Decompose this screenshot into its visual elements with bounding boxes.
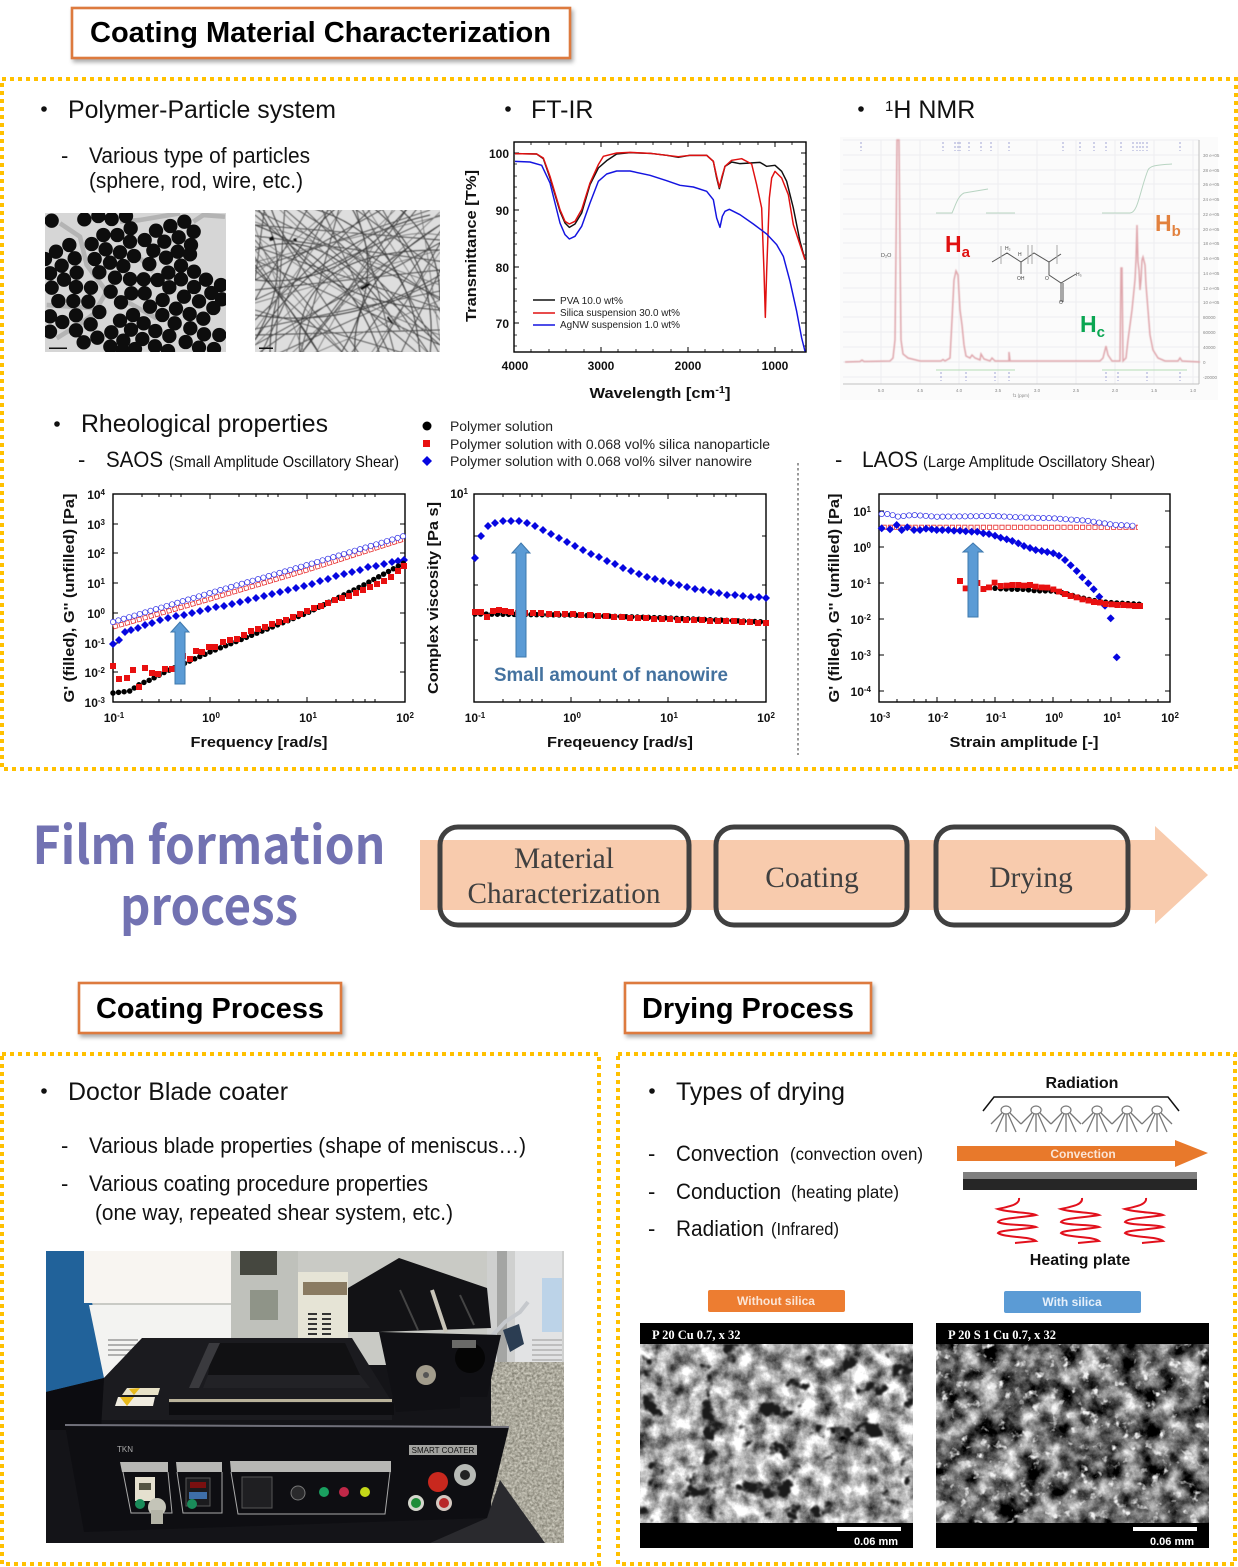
chart: 1H NMR spectrum: O	[1059, 300, 1063, 306]
chart: 1H NMR spectrum: 40000	[1203, 345, 1216, 350]
chart: 1H NMR spectrum: H₃	[1076, 272, 1082, 278]
chart: complex viscosity: Freqeuency [rad/s]	[547, 734, 693, 751]
text block: doctor blade coater: Various coating procedure properties	[89, 1171, 428, 1196]
heading: drying process: Drying Process	[642, 993, 854, 1025]
chart: LAOS strain sweep: 10	[853, 541, 867, 555]
chart: 1H NMR spectrum: 80000	[1203, 315, 1216, 320]
label: without silica	[708, 1290, 845, 1312]
chart: LAOS strain sweep: 0	[1058, 711, 1063, 720]
chart: 1H NMR spectrum: a	[962, 244, 971, 261]
panel: coating process	[2, 1054, 599, 1564]
chart: LAOS strain sweep: 10	[1103, 711, 1116, 725]
axis labels: -2	[98, 666, 106, 675]
chart: complex viscosity: 10	[757, 711, 770, 725]
chart: LAOS strain sweep: -3	[883, 711, 891, 720]
micrograph: with silica: P 20 S 1 Cu 0.7, x 32	[948, 1328, 1056, 1342]
chart: 1H NMR spectrum: 30 e+05	[1203, 153, 1220, 158]
tick labels: 1.5	[1151, 388, 1158, 393]
tick labels: 3.0	[1034, 388, 1041, 393]
chart: LAOS strain sweep: G' (filled), G'' (unfilled) [Pa]	[826, 494, 843, 702]
chart: FT-IR spectra: 80	[496, 261, 509, 275]
tick labels: 4.5	[917, 388, 924, 393]
step: material characterization: Characterization	[468, 878, 661, 910]
chart: LAOS strain sweep: 10	[928, 711, 941, 725]
text block: rheological properties: Rheological properties	[81, 410, 328, 438]
heading: 1H NMR: H NMR	[893, 96, 975, 124]
chart: SAOS storage and loss modulus	[61, 488, 414, 751]
chart: 1H NMR spectrum: 20 e+05	[1203, 227, 1220, 232]
chart: LAOS strain sweep: -2	[864, 613, 872, 622]
chart: LAOS strain sweep: -1	[999, 711, 1007, 720]
axis labels: 10	[202, 711, 215, 725]
text block: polymer-particle system	[41, 96, 336, 193]
text block: LAOS	[835, 447, 1155, 472]
title: film formation process	[32, 804, 386, 940]
chart: LAOS strain sweep: 10	[986, 711, 999, 725]
axis labels: -3	[98, 696, 106, 705]
tick labels: 5.0	[878, 388, 885, 393]
legend: polymer solutions: Polymer solution with 0.068 vol% silver nanowire	[450, 453, 752, 469]
micrograph: without silica	[640, 1323, 913, 1548]
micrograph: without silica: P 20 Cu 0.7, x 32	[652, 1328, 741, 1342]
panel: drying process	[618, 1054, 1235, 1564]
heading: coating process: Coating Process	[96, 993, 324, 1025]
label: with silica: With silica	[1042, 1295, 1102, 1309]
chart: LAOS strain sweep: 2	[1174, 711, 1179, 720]
chart: 1H NMR spectrum: H	[1155, 210, 1172, 236]
heading: Coating Material Characterization	[72, 8, 570, 58]
text block: types of drying: (heating plate)	[791, 1182, 899, 1202]
chart: FT-IR spectra: 70	[496, 317, 509, 331]
image: nanowire micrograph	[255, 210, 440, 352]
heading: Coating Material Characterization: Coating Material Characterization	[90, 17, 551, 49]
chart: 1H NMR spectrum: 0	[1203, 360, 1206, 365]
chart: LAOS strain sweep: 10	[1161, 711, 1174, 725]
machine control panel	[117, 1445, 477, 1524]
chart: LAOS strain sweep: 10	[1045, 711, 1058, 725]
heading: FT-IR: FT-IR	[531, 96, 594, 124]
chart: 1H NMR spectrum: c	[1097, 324, 1105, 341]
axis labels: -1	[98, 637, 106, 646]
axis labels: -1	[117, 711, 125, 720]
chart: 1H NMR spectrum: 28 e+05	[1203, 168, 1220, 173]
text block: doctor blade coater: (one way, repeated shear system, etc.)	[95, 1200, 453, 1225]
annotation: small amount of nanowire: Small amount of nanowire	[494, 665, 728, 686]
text block: types of drying: -	[648, 1179, 655, 1204]
tick labels: 2.0	[1112, 388, 1119, 393]
chart: FT-IR spectra: 2000	[675, 359, 702, 373]
text block: rheological properties	[54, 410, 399, 472]
text block: types of drying: Conduction	[676, 1179, 781, 1204]
chart: LAOS strain sweep: -1	[864, 577, 872, 586]
machine control panel: SMART COATER	[412, 1446, 475, 1455]
tick labels: 4.0	[956, 388, 963, 393]
chart: complex viscosity	[425, 487, 775, 751]
chart: 1H NMR spectrum: OH	[1017, 276, 1025, 282]
chart: SAOS storage and loss modulus: G' (filled), G'' (unfilled) [Pa]	[61, 494, 78, 702]
chart: 1H NMR spectrum: 60000	[1203, 330, 1216, 335]
tick labels: 1.0	[1190, 388, 1197, 393]
step: coating: Coating	[765, 862, 859, 894]
chart: complex viscosity: 2	[770, 711, 775, 720]
micrograph: with silica: 0.06 mm	[1150, 1536, 1194, 1548]
tick labels: f1 (ppm)	[1013, 393, 1030, 398]
text block: polymer-particle system: Polymer-Particle system	[68, 96, 336, 124]
text block: types of drying: Convection	[676, 1141, 779, 1166]
chart: complex viscosity: 10	[660, 711, 673, 725]
axis labels: 10	[87, 547, 101, 561]
text block: types of drying: (Infrared)	[771, 1219, 839, 1239]
heading: 1H NMR: 1	[885, 98, 893, 115]
chart: 1H NMR spectrum: H₂	[1005, 246, 1011, 252]
chart: 1H NMR spectrum: O	[1045, 276, 1049, 282]
axis labels: 10	[299, 711, 312, 725]
text block: types of drying: Radiation	[676, 1216, 764, 1241]
axis labels: 10	[85, 696, 98, 710]
axis labels: 2	[409, 711, 414, 720]
arrow: LAOS increase	[963, 543, 983, 617]
chart: 1H NMR spectrum: H	[945, 231, 962, 257]
chart: 1H NMR spectrum: 12 e+05	[1203, 286, 1220, 291]
text block: types of drying: -	[648, 1141, 655, 1166]
heading: drying process	[625, 983, 871, 1033]
axis labels: 10	[85, 666, 98, 680]
integrals	[936, 164, 1172, 213]
diagram: drying mechanisms: Heating plate	[1030, 1252, 1130, 1269]
micrograph: without silica: 0.06 mm	[854, 1536, 898, 1548]
tick labels	[878, 388, 1197, 398]
chart: 1H NMR spectrum: 24 e+05	[1203, 197, 1220, 202]
chart: complex viscosity: 10	[450, 487, 464, 501]
photo: doctor blade coater machine	[46, 1251, 564, 1543]
chart: SAOS storage and loss modulus: Frequency [rad/s]	[190, 734, 328, 751]
text block: types of drying: Types of drying	[676, 1078, 845, 1106]
chart: LAOS strain sweep: Strain amplitude [-]	[950, 734, 1099, 751]
legend: FT-IR	[533, 296, 680, 331]
chart: LAOS strain sweep: 10	[851, 685, 864, 699]
icon: radiation lamps	[991, 1106, 1172, 1132]
tick labels: 2.5	[1073, 388, 1080, 393]
tick labels: 3.5	[995, 388, 1002, 393]
chart: complex viscosity: -1	[478, 711, 486, 720]
chart: 1H NMR spectrum: H	[1080, 311, 1097, 337]
chart: complex viscosity: 0	[576, 711, 581, 720]
chart: LAOS strain sweep: -3	[864, 649, 872, 658]
text block: LAOS: -	[835, 447, 842, 472]
axis labels: 10	[87, 607, 101, 621]
chart: complex viscosity: 10	[465, 711, 478, 725]
chart: LAOS strain sweep: 1	[1116, 711, 1121, 720]
axis labels: 0	[215, 711, 220, 720]
chart: 1H NMR spectrum	[840, 137, 1220, 400]
curve: blue AgNW suspension	[515, 161, 805, 351]
label: without silica: Without silica	[737, 1294, 815, 1308]
legend: FT-IR: PVA 10.0 wt%	[560, 296, 623, 307]
text block: doctor blade coater: Various blade properties (shape of meniscus…)	[89, 1133, 526, 1158]
chart: LAOS strain sweep: -4	[864, 685, 872, 694]
label: with silica	[1004, 1291, 1141, 1313]
chart: FT-IR spectra: -1	[715, 385, 725, 396]
chart: LAOS strain sweep: 1	[867, 505, 872, 514]
text block: doctor blade coater: -	[61, 1171, 68, 1196]
legend: FT-IR: AgNW suspension 1.0 wt%	[560, 320, 680, 331]
chart: FT-IR spectra: 4000	[502, 359, 529, 373]
axis labels: 10	[104, 711, 117, 725]
arrow: convection	[957, 1140, 1208, 1167]
legend: FT-IR: Silica suspension 30.0 wt%	[560, 308, 680, 319]
chart: 1H NMR spectrum: 16 e+05	[1203, 256, 1220, 261]
text block: doctor blade coater: -	[61, 1133, 68, 1158]
chart: FT-IR spectra	[463, 142, 806, 402]
heading: coating process	[79, 983, 341, 1033]
icon: heat waves	[998, 1198, 1163, 1243]
diagram: drying mechanisms: Radiation	[1046, 1075, 1118, 1092]
axis labels: 10	[87, 518, 101, 532]
chart: complex viscosity: 1	[673, 711, 678, 720]
chart: LAOS strain sweep: 10	[851, 577, 864, 591]
step: drying: Drying	[989, 862, 1073, 894]
micrograph: with silica	[936, 1323, 1209, 1548]
axis labels: 1	[312, 711, 317, 720]
chart: FT-IR spectra: 90	[496, 204, 509, 218]
curve: red silica suspension	[515, 152, 805, 317]
text block: polymer-particle system: (sphere, rod, wire, etc.)	[89, 168, 303, 193]
text block: LAOS: (Large Amplitude Oscillatory Shear)	[923, 454, 1155, 471]
text block: rheological properties: (Small Amplitude Oscillatory Shear)	[169, 454, 399, 471]
step: coating	[716, 827, 907, 925]
axis labels: 3	[101, 518, 106, 527]
legend: polymer solutions	[422, 418, 770, 469]
chart: 1H NMR spectrum: 14 e+05	[1203, 271, 1220, 276]
chart: LAOS strain sweep: 0	[867, 541, 872, 550]
chart: 1H NMR spectrum: 26 e+05	[1203, 182, 1220, 187]
axis labels: 10	[87, 577, 101, 591]
axis labels: 0	[101, 607, 106, 616]
arrow: viscosity increase	[512, 543, 530, 657]
axis labels: 1	[101, 577, 106, 586]
chart: 1H NMR spectrum: H	[1018, 252, 1022, 258]
chart: 1H NMR spectrum: -20000	[1203, 375, 1218, 380]
axis labels	[85, 488, 414, 725]
text block: types of drying	[648, 1078, 923, 1241]
chart: 1H NMR spectrum: b	[1172, 223, 1181, 240]
text block: types of drying: -	[648, 1216, 655, 1241]
axis labels: 4	[101, 488, 106, 497]
chart: LAOS strain sweep: 10	[853, 505, 867, 519]
chart: 1H NMR spectrum: 10 e+05	[1203, 300, 1220, 305]
legend: polymer solutions: Polymer solution with 0.068 vol% silica nanoparticle	[450, 436, 770, 452]
step: material characterization	[440, 827, 689, 925]
chart: FT-IR spectra: 1000	[762, 359, 789, 373]
axis labels: 10	[85, 637, 98, 651]
text block: polymer-particle system: -	[61, 143, 68, 168]
chart: 1H NMR spectrum: 18 e+05	[1203, 241, 1220, 246]
step: drying	[936, 827, 1128, 925]
chart: LAOS strain sweep: 10	[870, 711, 883, 725]
step: material characterization: Material	[514, 843, 614, 875]
diagram: drying mechanisms	[957, 1075, 1208, 1269]
series: hollow red and blue	[113, 536, 404, 627]
chart: 1H NMR spectrum: 22 e+05	[1203, 212, 1220, 217]
text block: doctor blade coater	[41, 1078, 526, 1225]
axis labels: 2	[101, 547, 106, 556]
chart: FT-IR spectra: 100	[489, 147, 509, 161]
chart: complex viscosity: 10	[563, 711, 576, 725]
chart: FT-IR spectra: Wavelength [cm	[590, 385, 704, 402]
text block: doctor blade coater: Doctor Blade coater	[68, 1078, 288, 1106]
chart: LAOS strain sweep: -2	[941, 711, 949, 720]
text block: types of drying: (convection oven)	[790, 1144, 923, 1164]
arrow: convection: Convection	[1050, 1147, 1116, 1161]
chart: LAOS strain sweep: 10	[851, 649, 864, 663]
text block: rheological properties: -	[78, 447, 85, 472]
text block: LAOS: LAOS	[862, 447, 918, 472]
molecule	[992, 245, 1076, 302]
heading: 1H NMR	[858, 96, 975, 124]
title: film formation process: Film formation	[32, 804, 386, 879]
chart: complex viscosity: Complex viscosity [Pa s]	[425, 502, 442, 694]
panel: coating material characterization	[2, 79, 1236, 769]
process arrow	[420, 826, 1208, 925]
text block: polymer-particle system: Various type of particles	[89, 143, 310, 168]
chart: complex viscosity: 1	[464, 487, 469, 496]
image: sphere particles micrograph	[45, 213, 226, 352]
machine control panel: TKN	[117, 1445, 133, 1454]
axis labels: 10	[396, 711, 409, 725]
text block: rheological properties: SAOS	[106, 447, 163, 472]
chart: FT-IR spectra: ]	[725, 385, 730, 402]
curve: black PVA	[515, 153, 805, 260]
chart: FT-IR spectra: Transmittance [T%]	[463, 170, 480, 322]
title: film formation process: process	[120, 865, 298, 940]
chart: LAOS strain sweep	[826, 494, 1179, 751]
arrow: increase	[171, 622, 189, 684]
legend: polymer solutions: Polymer solution	[450, 418, 553, 434]
chart: LAOS strain sweep: 10	[851, 613, 864, 627]
chart: 1H NMR spectrum: D₂O	[881, 253, 892, 259]
chart: FT-IR spectra: 3000	[588, 359, 615, 373]
axis labels: 10	[87, 488, 101, 502]
